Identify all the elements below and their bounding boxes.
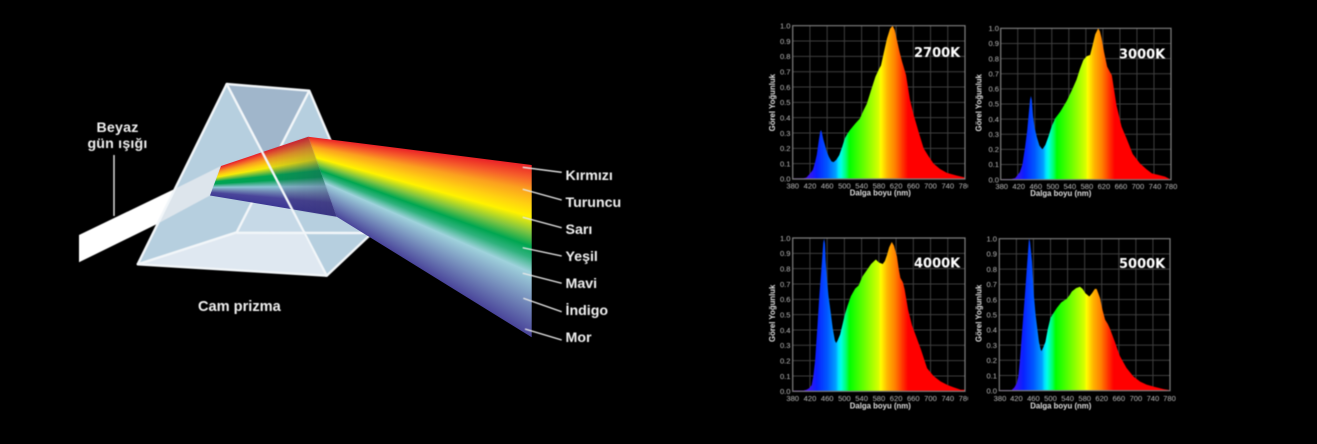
- prism edges: [138, 84, 370, 276]
- y axis ticks 5000K: 0.6: [986, 295, 997, 304]
- x axis ticks 2700K: 660: [907, 182, 920, 191]
- x axis ticks 4000K: 420: [804, 394, 816, 403]
- chart: 5000K spectrum: [974, 234, 1176, 411]
- label: white sunlight: gün ışığı: [87, 136, 148, 152]
- x axis ticks 5000K: 740: [1147, 394, 1159, 403]
- x axis ticks 4000K: [786, 392, 976, 403]
- y axis ticks 3000K: 0.1: [988, 160, 999, 169]
- axis titles 2700K: Dalga boyu (nm): [850, 189, 911, 198]
- y axis ticks 3000K: 0.2: [988, 145, 999, 154]
- x axis ticks 4000K: 460: [821, 394, 834, 403]
- colour labels with leader lines: [523, 167, 621, 346]
- y axis ticks 2700K: 0.3: [780, 129, 790, 138]
- axis titles 3000K: Dalga boyu (nm): [1030, 189, 1092, 198]
- x axis ticks 2700K: 620: [890, 182, 902, 191]
- x axis ticks 3000K: 780: [1165, 182, 1177, 191]
- chart: 4000K spectrum: [768, 234, 976, 411]
- y axis ticks 3000K: 0.4: [988, 115, 999, 124]
- rainbow beam inside prism: [210, 136, 337, 217]
- x axis ticks 5000K: 460: [1027, 394, 1040, 403]
- y axis ticks 2700K: 0.7: [780, 68, 790, 76]
- y axis ticks 2700K: 1.0: [780, 22, 790, 30]
- x axis ticks 3000K: 660: [1115, 182, 1127, 191]
- prism floor: [138, 232, 327, 276]
- label: glass prism: Cam prizma: [198, 299, 282, 315]
- y axis ticks 3000K: 1.0: [988, 24, 999, 33]
- colour temperature label 5000K: 5000K: [1119, 257, 1166, 272]
- x axis ticks 4000K: 780: [959, 394, 971, 403]
- x axis ticks 5000K: 420: [1010, 394, 1023, 403]
- y axis ticks 5000K: 0.3: [986, 341, 997, 350]
- y axis ticks 5000K: 1.0: [986, 234, 997, 244]
- y axis ticks 3000K: 0.7: [988, 69, 999, 78]
- colour temperature label 3000K: 3000K: [1119, 48, 1166, 62]
- y axis ticks 5000K: 0.8: [986, 265, 997, 274]
- x axis ticks 5000K: 780: [1163, 394, 1176, 403]
- axis titles 5000K: Görel Yoğunluk: [974, 284, 984, 342]
- x axis ticks 3000K: 580: [1081, 182, 1093, 191]
- x axis ticks 2700K: 580: [873, 182, 885, 191]
- axis titles 2700K: [768, 73, 911, 198]
- y axis ticks 3000K: 0.6: [988, 84, 999, 94]
- x axis ticks 4000K: 740: [941, 394, 954, 403]
- prism back face: [227, 84, 309, 167]
- axis titles 4000K: Görel Yoğunluk: [768, 284, 777, 342]
- y axis ticks 3000K: [988, 24, 999, 184]
- y axis ticks 4000K: 0.6: [780, 295, 790, 304]
- x axis ticks 2700K: 540: [855, 182, 868, 191]
- y axis ticks 2700K: 0.8: [780, 52, 790, 61]
- x axis ticks 5000K: 500: [1044, 394, 1057, 403]
- y axis ticks 2700K: 0.1: [780, 160, 790, 168]
- y axis ticks 4000K: 1.0: [780, 234, 790, 243]
- x axis ticks 5000K: 580: [1078, 394, 1091, 403]
- x axis ticks 3000K: 380: [995, 182, 1008, 191]
- x axis ticks 2700K: 500: [838, 182, 851, 191]
- x axis ticks 3000K: 620: [1098, 182, 1110, 191]
- plot area 3000K: [999, 27, 1172, 181]
- y axis ticks 3000K: 0.0: [988, 175, 999, 184]
- axis titles 3000K: [974, 73, 1092, 198]
- axis titles 5000K: Dalga boyu (nm): [1030, 402, 1092, 411]
- x axis ticks 4000K: 380: [786, 394, 799, 403]
- rainbow beam fanning out of prism: [308, 136, 532, 338]
- y axis ticks 2700K: 0.0: [780, 174, 790, 184]
- white light beam outside prism: [79, 188, 176, 262]
- colour labels with leader lines: Kırmızı: [566, 168, 613, 184]
- y axis ticks 5000K: 0.0: [986, 386, 997, 396]
- y axis ticks 4000K: 0.2: [780, 356, 790, 365]
- x axis ticks 4000K: 620: [890, 394, 902, 403]
- y axis ticks 5000K: [986, 234, 997, 396]
- y axis ticks 4000K: 0.0: [780, 387, 790, 396]
- x axis ticks 5000K: 700: [1130, 394, 1142, 403]
- prism body: [138, 84, 370, 276]
- y axis ticks 2700K: 0.5: [780, 98, 790, 107]
- axis titles 4000K: [768, 284, 911, 411]
- chart: 2700K spectrum: [768, 22, 976, 198]
- x axis ticks 4000K: 660: [907, 394, 920, 403]
- plot area 2700K: [791, 24, 966, 180]
- x axis ticks 5000K: [994, 394, 1176, 403]
- x axis ticks 4000K: 500: [838, 394, 851, 403]
- plot area 5000K: [998, 238, 1172, 392]
- y axis ticks 4000K: 0.5: [780, 310, 790, 319]
- x axis ticks 2700K: 420: [804, 182, 816, 191]
- prism inner back face: [237, 167, 303, 232]
- x axis ticks 2700K: 380: [786, 182, 799, 191]
- y axis ticks 5000K: 0.4: [986, 326, 997, 335]
- x axis ticks 3000K: 420: [1012, 182, 1025, 191]
- x axis ticks 5000K: 380: [994, 394, 1006, 403]
- x axis ticks 2700K: 700: [924, 182, 937, 191]
- y axis ticks 2700K: 0.9: [780, 37, 790, 46]
- x axis ticks 3000K: [995, 182, 1177, 191]
- y axis ticks 3000K: 0.3: [988, 130, 999, 139]
- colour labels with leader lines: Mavi: [566, 276, 597, 292]
- y axis ticks 5000K: 0.9: [986, 250, 997, 259]
- front prism edge: [227, 84, 327, 276]
- x axis ticks 2700K: 740: [941, 182, 954, 191]
- x axis ticks 4000K: 580: [873, 394, 885, 403]
- white light beam inside prism: [157, 166, 221, 224]
- chart: 3000K spectrum: [974, 24, 1177, 198]
- colour labels with leader lines: Yeşil: [566, 249, 598, 265]
- y axis ticks 4000K: [780, 234, 790, 396]
- colour labels with leader lines: Mor: [566, 330, 592, 346]
- x axis ticks 2700K: 460: [821, 182, 834, 191]
- y axis ticks 4000K: 0.9: [780, 249, 790, 258]
- y axis ticks 5000K: 0.7: [986, 280, 997, 289]
- y axis ticks 4000K: 0.1: [780, 372, 790, 381]
- colour labels with leader lines: İndigo: [566, 302, 608, 319]
- plot area 4000K: [791, 236, 966, 392]
- colour labels with leader lines: Sarı: [566, 222, 592, 238]
- y axis ticks 2700K: 0.6: [780, 83, 790, 92]
- x axis ticks 4000K: 540: [855, 394, 868, 403]
- colour temperature label 4000K: 4000K: [914, 256, 961, 272]
- x axis ticks 5000K: 660: [1112, 394, 1125, 403]
- y axis ticks 4000K: 0.4: [780, 326, 790, 335]
- x axis ticks 3000K: 540: [1063, 182, 1076, 191]
- x axis ticks 5000K: 540: [1061, 394, 1074, 403]
- axis titles 4000K: Dalga boyu (nm): [850, 402, 911, 411]
- label: white sunlight: Beyaz: [96, 120, 139, 136]
- y axis ticks 4000K: 0.8: [780, 264, 790, 273]
- axis titles 3000K: Görel Yoğunluk: [974, 73, 984, 131]
- y axis ticks 5000K: 0.1: [986, 371, 997, 380]
- shaded part of the beam: [263, 137, 337, 217]
- colour labels with leader lines: Turuncu: [566, 195, 621, 211]
- x axis ticks 3000K: 500: [1046, 182, 1059, 191]
- colour temperature label 2700K: 2700K: [914, 46, 961, 61]
- x axis ticks 3000K: 740: [1149, 182, 1161, 191]
- y axis ticks 2700K: 0.4: [780, 114, 790, 122]
- x axis ticks 4000K: 700: [924, 394, 937, 403]
- y axis ticks 5000K: 0.2: [986, 356, 997, 365]
- axis titles 2700K: Görel Yoğunluk: [768, 73, 777, 131]
- y axis ticks 4000K: 0.3: [780, 341, 790, 350]
- y axis ticks 5000K: 0.5: [986, 310, 997, 320]
- y axis ticks 3000K: 0.9: [988, 39, 999, 48]
- x axis ticks 2700K: 780: [959, 182, 971, 191]
- x axis ticks 2700K: [786, 180, 976, 191]
- x axis ticks 5000K: 620: [1095, 394, 1108, 403]
- label: white sunlight: [87, 120, 148, 216]
- y axis ticks 4000K: 0.7: [780, 280, 790, 289]
- axis titles 5000K: [974, 284, 1092, 411]
- y axis ticks 3000K: 0.5: [988, 100, 999, 109]
- y axis ticks 3000K: 0.8: [988, 54, 999, 63]
- y axis ticks 2700K: [780, 22, 790, 184]
- x axis ticks 3000K: 700: [1132, 182, 1144, 191]
- y axis ticks 2700K: 0.2: [780, 144, 790, 153]
- x axis ticks 3000K: 460: [1029, 182, 1042, 191]
